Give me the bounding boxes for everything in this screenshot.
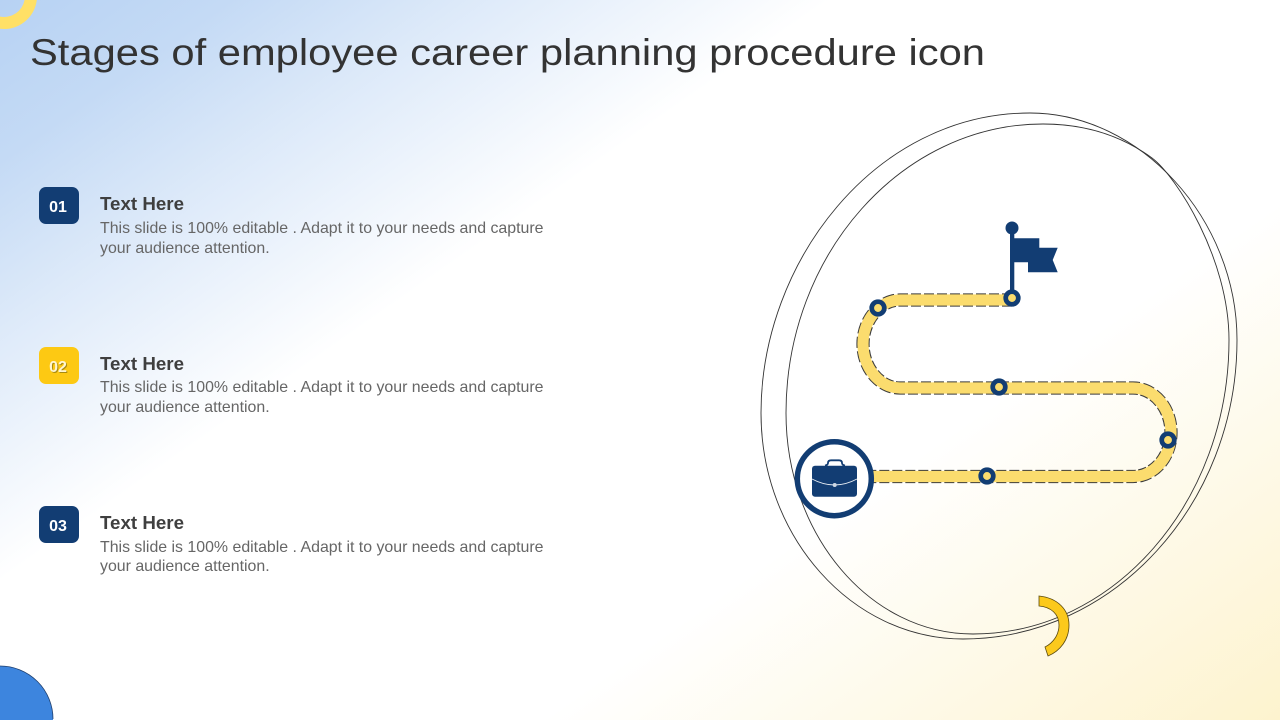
badge 02: 02 (49, 359, 67, 376)
heading 03: Text Here (100, 513, 184, 533)
text block 02: This slide is 100% editable . Adapt it to your needs and capture (100, 379, 544, 396)
text block 02: your audience attention. (100, 399, 270, 416)
milestone markers (872, 302, 1174, 482)
badge 02 (39, 347, 79, 384)
text block 03: This slide is 100% editable . Adapt it to your needs and capture (100, 539, 544, 556)
winding career road (863, 300, 1171, 476)
text block 01: your audience attention. (100, 240, 270, 257)
badge 01: 01 (49, 199, 67, 216)
badge 01 (39, 187, 79, 224)
yellow arc accent (1039, 596, 1069, 656)
item 01 (39, 187, 544, 257)
heading 01: Text Here (100, 194, 184, 214)
badge 03 (39, 506, 79, 543)
icon: flag (1006, 222, 1058, 304)
item 03 (39, 506, 544, 575)
text block 01: This slide is 100% editable . Adapt it to your needs and capture (100, 220, 544, 237)
decorative circle: bottom left (0, 666, 53, 720)
text block 03: your audience attention. (100, 558, 270, 575)
icon: briefcase in circle (797, 442, 871, 516)
badge 03: 03 (49, 518, 67, 535)
decorative ring: top left (0, 0, 37, 29)
item 02 (39, 347, 544, 416)
heading 02: Text Here (100, 354, 184, 374)
outline loops (761, 113, 1237, 639)
title: Stages of employee career planning procedure icon (30, 32, 985, 73)
